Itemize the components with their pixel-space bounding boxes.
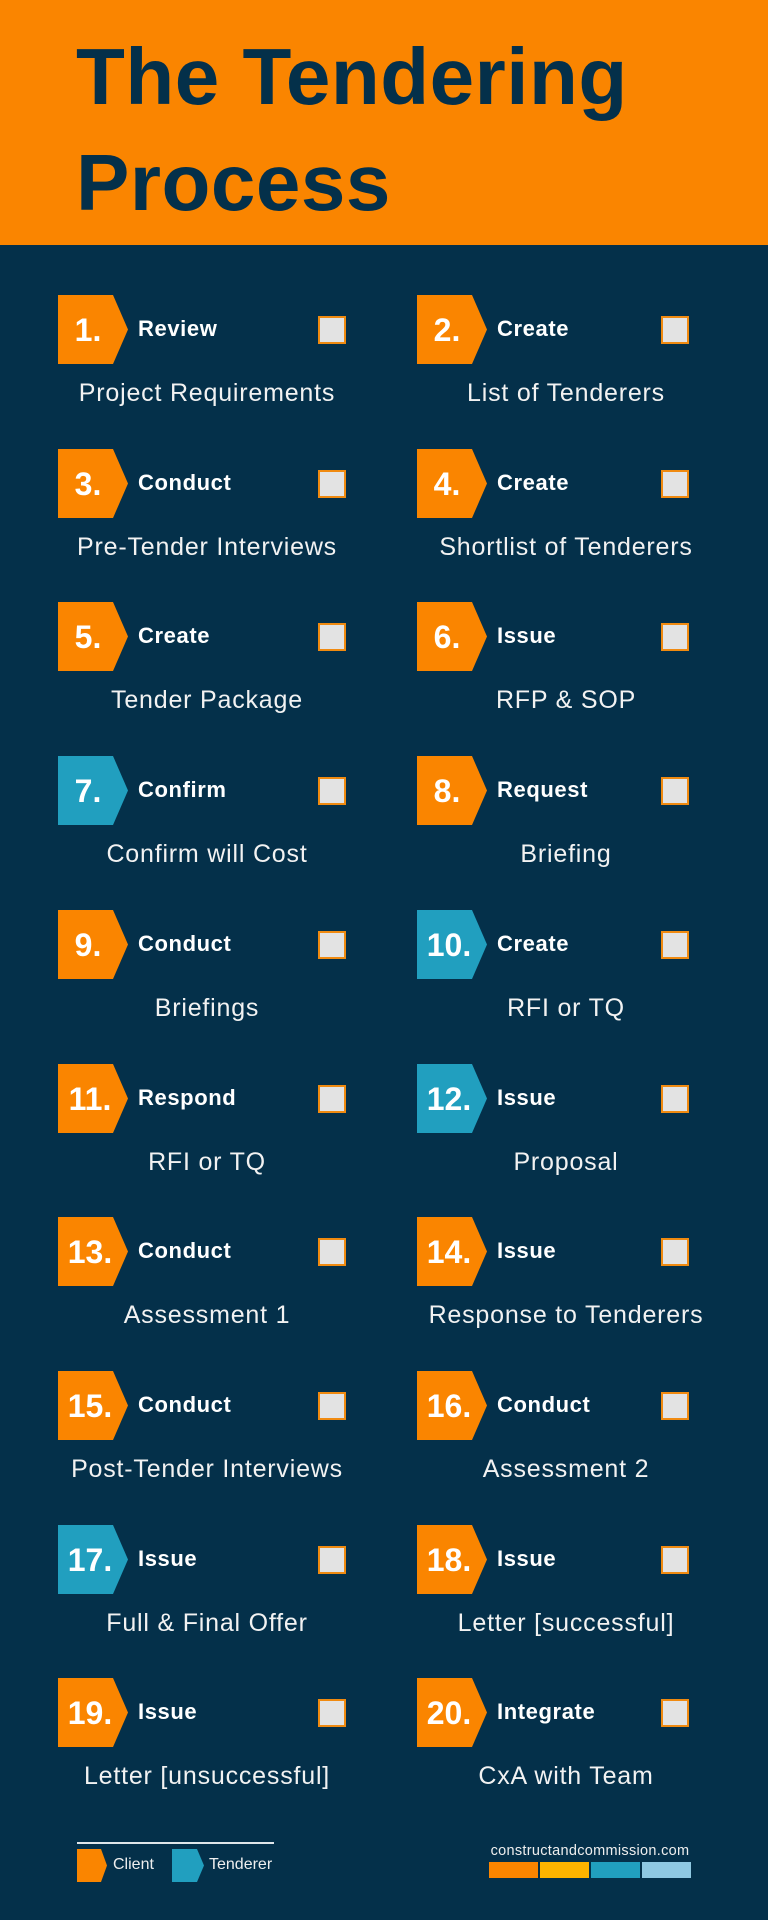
- step 12: Proposal: [513, 1148, 619, 1176]
- step 9: Briefings: [155, 994, 259, 1022]
- legend: client: Client: [113, 1856, 154, 1873]
- step 2: List of Tenderers: [467, 379, 665, 407]
- step 5: 5.: [75, 619, 101, 655]
- step 18: Letter [successful]: [458, 1609, 674, 1637]
- step 1: Review: [138, 316, 217, 341]
- step 19: 19.: [68, 1695, 112, 1731]
- step 7: Confirm: [138, 777, 227, 802]
- step 4: 4.: [434, 466, 460, 502]
- logo: constructandcommission.com: [489, 1843, 691, 1878]
- step 14: Issue: [497, 1238, 556, 1263]
- step 6: [417, 602, 689, 714]
- step 18: Issue: [497, 1546, 556, 1571]
- step 14: 14.: [427, 1234, 471, 1270]
- header banner: [0, 0, 768, 245]
- step 20: [417, 1678, 689, 1790]
- step 18: [417, 1525, 689, 1637]
- step 12: [417, 1064, 689, 1176]
- legend: tenderer: [172, 1849, 272, 1882]
- step 15: Conduct: [138, 1392, 231, 1417]
- step 16: [417, 1371, 689, 1483]
- step 2: 2.: [434, 312, 460, 348]
- step 16: 16.: [427, 1388, 471, 1424]
- step 8: [417, 756, 689, 868]
- step 2: Create: [497, 316, 569, 341]
- step 2: [417, 295, 689, 407]
- step 6: Issue: [497, 623, 556, 648]
- step 13: [58, 1217, 346, 1329]
- step 3: Pre-Tender Interviews: [77, 533, 337, 561]
- step 9: Conduct: [138, 931, 231, 956]
- legend: tenderer: Tenderer: [209, 1856, 272, 1873]
- step 3: Conduct: [138, 470, 231, 495]
- step 9: [58, 910, 346, 1022]
- step 20: Integrate: [497, 1699, 595, 1724]
- step 7: [58, 756, 346, 868]
- step 12: 12.: [427, 1081, 471, 1117]
- step 10: RFI or TQ: [507, 994, 625, 1022]
- step 12: Issue: [497, 1085, 556, 1110]
- step 3: 3.: [75, 466, 101, 502]
- step 11: [58, 1064, 346, 1176]
- step 19: [58, 1678, 346, 1790]
- title line 1: The Tendering: [76, 32, 628, 121]
- step 15: [58, 1371, 346, 1483]
- step 11: Respond: [138, 1085, 236, 1110]
- step 5: [58, 602, 346, 714]
- step 8: Request: [497, 777, 588, 802]
- step 7: 7.: [75, 773, 101, 809]
- step 6: 6.: [434, 619, 460, 655]
- step 10: Create: [497, 931, 569, 956]
- step 18: 18.: [427, 1542, 471, 1578]
- step 11: RFI or TQ: [148, 1148, 266, 1176]
- step 20: CxA with Team: [478, 1762, 654, 1790]
- step 1: [58, 295, 346, 407]
- legend: client: [77, 1849, 154, 1882]
- step 1: Project Requirements: [79, 379, 335, 407]
- title line 2: Process: [76, 138, 391, 227]
- step 14: [417, 1217, 703, 1329]
- step 17: Issue: [138, 1546, 197, 1571]
- step 4: Shortlist of Tenderers: [439, 533, 693, 561]
- step 15: 15.: [68, 1388, 112, 1424]
- legend: [77, 1849, 272, 1882]
- step 20: 20.: [427, 1695, 471, 1731]
- step 8: Briefing: [520, 840, 612, 868]
- step 19: Issue: [138, 1699, 197, 1724]
- step 17: Full & Final Offer: [106, 1609, 308, 1637]
- step 14: Response to Tenderers: [429, 1301, 703, 1329]
- step 13: Assessment 1: [124, 1301, 290, 1329]
- step 17: 17.: [68, 1542, 112, 1578]
- step 15: Post-Tender Interviews: [71, 1455, 343, 1483]
- step 16: Conduct: [497, 1392, 590, 1417]
- step 1: 1.: [75, 312, 101, 348]
- step 9: 9.: [75, 927, 101, 963]
- step 7: Confirm will Cost: [106, 840, 308, 868]
- step 17: [58, 1525, 346, 1637]
- step 10: 10.: [427, 927, 471, 963]
- logo: constructandcommission.com: constructandcommission.com: [491, 1843, 689, 1859]
- step 6: RFP & SOP: [496, 686, 636, 714]
- step 16: Assessment 2: [483, 1455, 649, 1483]
- step 8: 8.: [434, 773, 460, 809]
- step 4: [417, 449, 693, 561]
- step 13: 13.: [68, 1234, 112, 1270]
- step 10: [417, 910, 689, 1022]
- step 4: Create: [497, 470, 569, 495]
- step 5: Tender Package: [111, 686, 303, 714]
- step 3: [58, 449, 346, 561]
- step 5: Create: [138, 623, 210, 648]
- step 19: Letter [unsuccessful]: [84, 1762, 330, 1790]
- step 11: 11.: [69, 1081, 111, 1117]
- step 13: Conduct: [138, 1238, 231, 1263]
